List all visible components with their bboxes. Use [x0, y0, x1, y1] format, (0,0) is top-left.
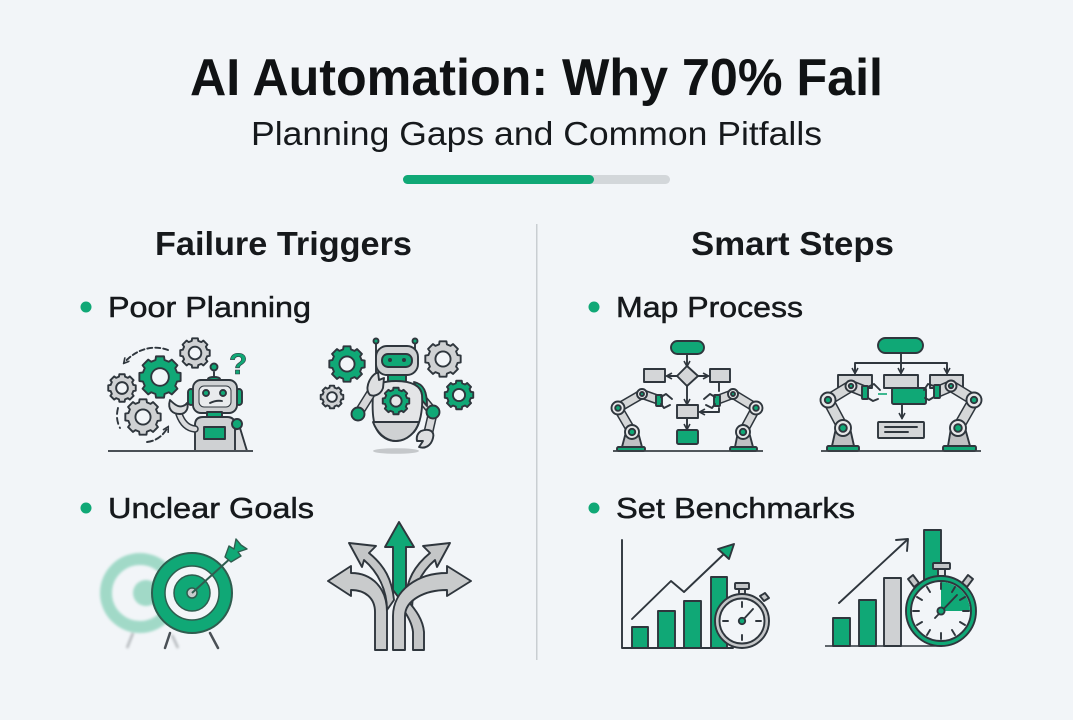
icon: process tree with two robot arms: [820, 338, 982, 451]
icon: confused robot with gears: ?: [229, 348, 247, 381]
left robot arm: [820, 380, 880, 451]
icon: bar chart with small stopwatch: [622, 540, 769, 648]
icon: flowchart with two robot arms: [612, 341, 763, 451]
left robot arm: [612, 389, 672, 451]
title: AI Automation: Why 70% Fail: [190, 49, 883, 107]
icon: diverging arrows: [328, 522, 471, 650]
green gear: [139, 356, 181, 398]
heading: failure triggers: Failure Triggers: [155, 225, 412, 262]
heading: smart steps: Smart Steps: [691, 225, 894, 262]
subtitle: Planning Gaps and Common Pitfalls: [251, 115, 822, 152]
right robot arm: [924, 380, 982, 451]
bullet: map process: Map Process: [616, 292, 803, 324]
right robot arm: [704, 389, 762, 451]
icon: confused robot with gears: [108, 338, 253, 451]
column divider: [536, 224, 538, 660]
panel: failure triggers: [80, 225, 473, 650]
bullet: set benchmarks: Set Benchmarks: [616, 493, 855, 525]
bullet: unclear goals: Unclear Goals: [108, 493, 314, 525]
progress bar: [403, 175, 670, 184]
panel: smart steps: [588, 225, 982, 648]
icon: thinking robot with gears: [321, 338, 473, 454]
icon: blurred target with arrow: [106, 539, 247, 648]
icon: bar chart with large stopwatch: [825, 530, 976, 646]
bullet: poor planning: Poor Planning: [108, 292, 311, 324]
